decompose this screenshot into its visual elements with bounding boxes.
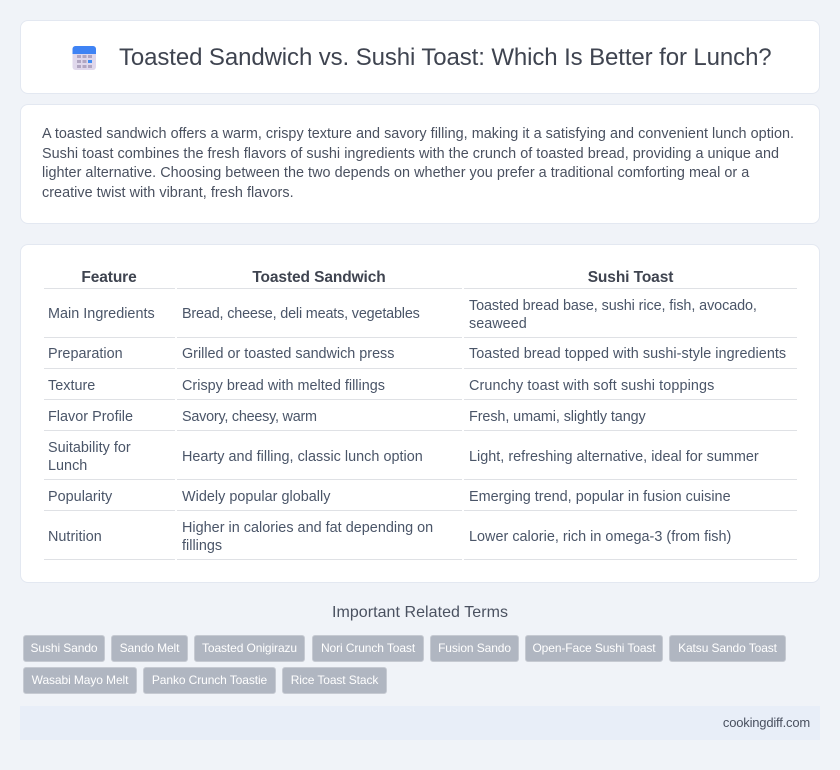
tag: Fusion Sando (438, 641, 511, 655)
row: suitability for lunch: Light, refreshing alternative, ideal for summer (469, 449, 759, 465)
panel: introduction text (20, 104, 820, 224)
row: flavor profile (48, 409, 646, 425)
footer (20, 706, 820, 740)
tag: Toasted Onigirazu (202, 641, 297, 655)
row: flavor profile: Savory, cheesy, warm (182, 409, 317, 425)
row: nutrition: Higher in calories and fat depending on (182, 520, 433, 536)
table header: Toasted Sandwich (252, 269, 386, 286)
row: popularity (48, 489, 731, 505)
row: preparation: Preparation (48, 346, 123, 362)
tag (194, 635, 305, 662)
intro paragraph: lighter alternative. Choosing between the two depends on whether you prefer a traditional comforting meal or a (42, 165, 749, 181)
table header (81, 269, 674, 286)
row: flavor profile: Flavor Profile (48, 409, 133, 425)
heading: Toasted Sandwich vs. Sushi Toast: Which Is Better for Lunch? (119, 44, 772, 71)
tag (23, 635, 105, 662)
tag (143, 667, 276, 694)
tag (525, 635, 663, 662)
row: nutrition (48, 520, 731, 554)
tag (312, 635, 424, 662)
row: texture: Crunchy toast with soft sushi toppings (469, 378, 714, 394)
icon: calendar (72, 46, 96, 70)
tag list (23, 635, 786, 694)
intro paragraph: creative twist with vibrant, fresh flavors. (42, 184, 294, 200)
table header: Sushi Toast (588, 269, 673, 286)
row: suitability for lunch: Suitability for (48, 440, 131, 456)
tag: Sushi Sando (31, 641, 97, 655)
tag (282, 667, 387, 694)
table header: Feature (81, 269, 137, 286)
tag: Wasabi Mayo Melt (32, 673, 128, 687)
row: preparation: Toasted bread topped with sushi-style ingredients (469, 346, 786, 362)
row: main ingredients: Main Ingredients (48, 306, 155, 322)
row: preparation: Grilled or toasted sandwich press (182, 346, 394, 362)
tag (669, 635, 786, 662)
tag: Katsu Sando Toast (678, 641, 777, 655)
heading: related terms: Important Related Terms (332, 604, 508, 621)
tag (430, 635, 519, 662)
row: main ingredients (48, 298, 757, 332)
row: texture: Crispy bread with melted fillings (182, 378, 385, 394)
source credit: cookingdiff.com (723, 715, 810, 730)
row: popularity: Emerging trend, popular in fusion cuisine (469, 489, 731, 505)
row: suitability for lunch (48, 440, 759, 474)
row: main ingredients: Toasted bread base, sushi rice, fish, avocado, (469, 298, 757, 314)
row: flavor profile: Fresh, umami, slightly tangy (469, 409, 646, 425)
intro paragraph (42, 126, 794, 200)
intro paragraph: A toasted sandwich offers a warm, crispy texture and savory filling, making it a satisfying and convenient lunch option. (42, 126, 794, 142)
intro paragraph: Sushi toast combines the fresh flavors of sushi ingredients with the crunch of toasted bread, providing a unique and (42, 146, 779, 162)
row: texture: Texture (48, 378, 95, 394)
panel: title (20, 20, 820, 94)
row: texture (48, 378, 714, 394)
tag: Sando Melt (120, 641, 179, 655)
row: popularity: Widely popular globally (182, 489, 330, 505)
tag: Nori Crunch Toast (321, 641, 415, 655)
panel: comparison table (20, 244, 820, 583)
tag (111, 635, 188, 662)
row: nutrition: Nutrition (48, 529, 102, 545)
row: main ingredients: seaweed (469, 316, 527, 332)
row: preparation (48, 346, 786, 362)
row: suitability for lunch: Lunch (48, 458, 87, 474)
row: nutrition: fillings (182, 538, 222, 554)
row: popularity: Popularity (48, 489, 112, 505)
tag: Rice Toast Stack (291, 673, 378, 687)
tag: Open-Face Sushi Toast (532, 641, 656, 655)
tag (23, 667, 137, 694)
row: nutrition: Lower calorie, rich in omega-3 (from fish) (469, 529, 731, 545)
tag: Panko Crunch Toastie (152, 673, 267, 687)
row: main ingredients: Bread, cheese, deli meats, vegetables (182, 306, 420, 322)
row: suitability for lunch: Hearty and filling, classic lunch option (182, 449, 423, 465)
